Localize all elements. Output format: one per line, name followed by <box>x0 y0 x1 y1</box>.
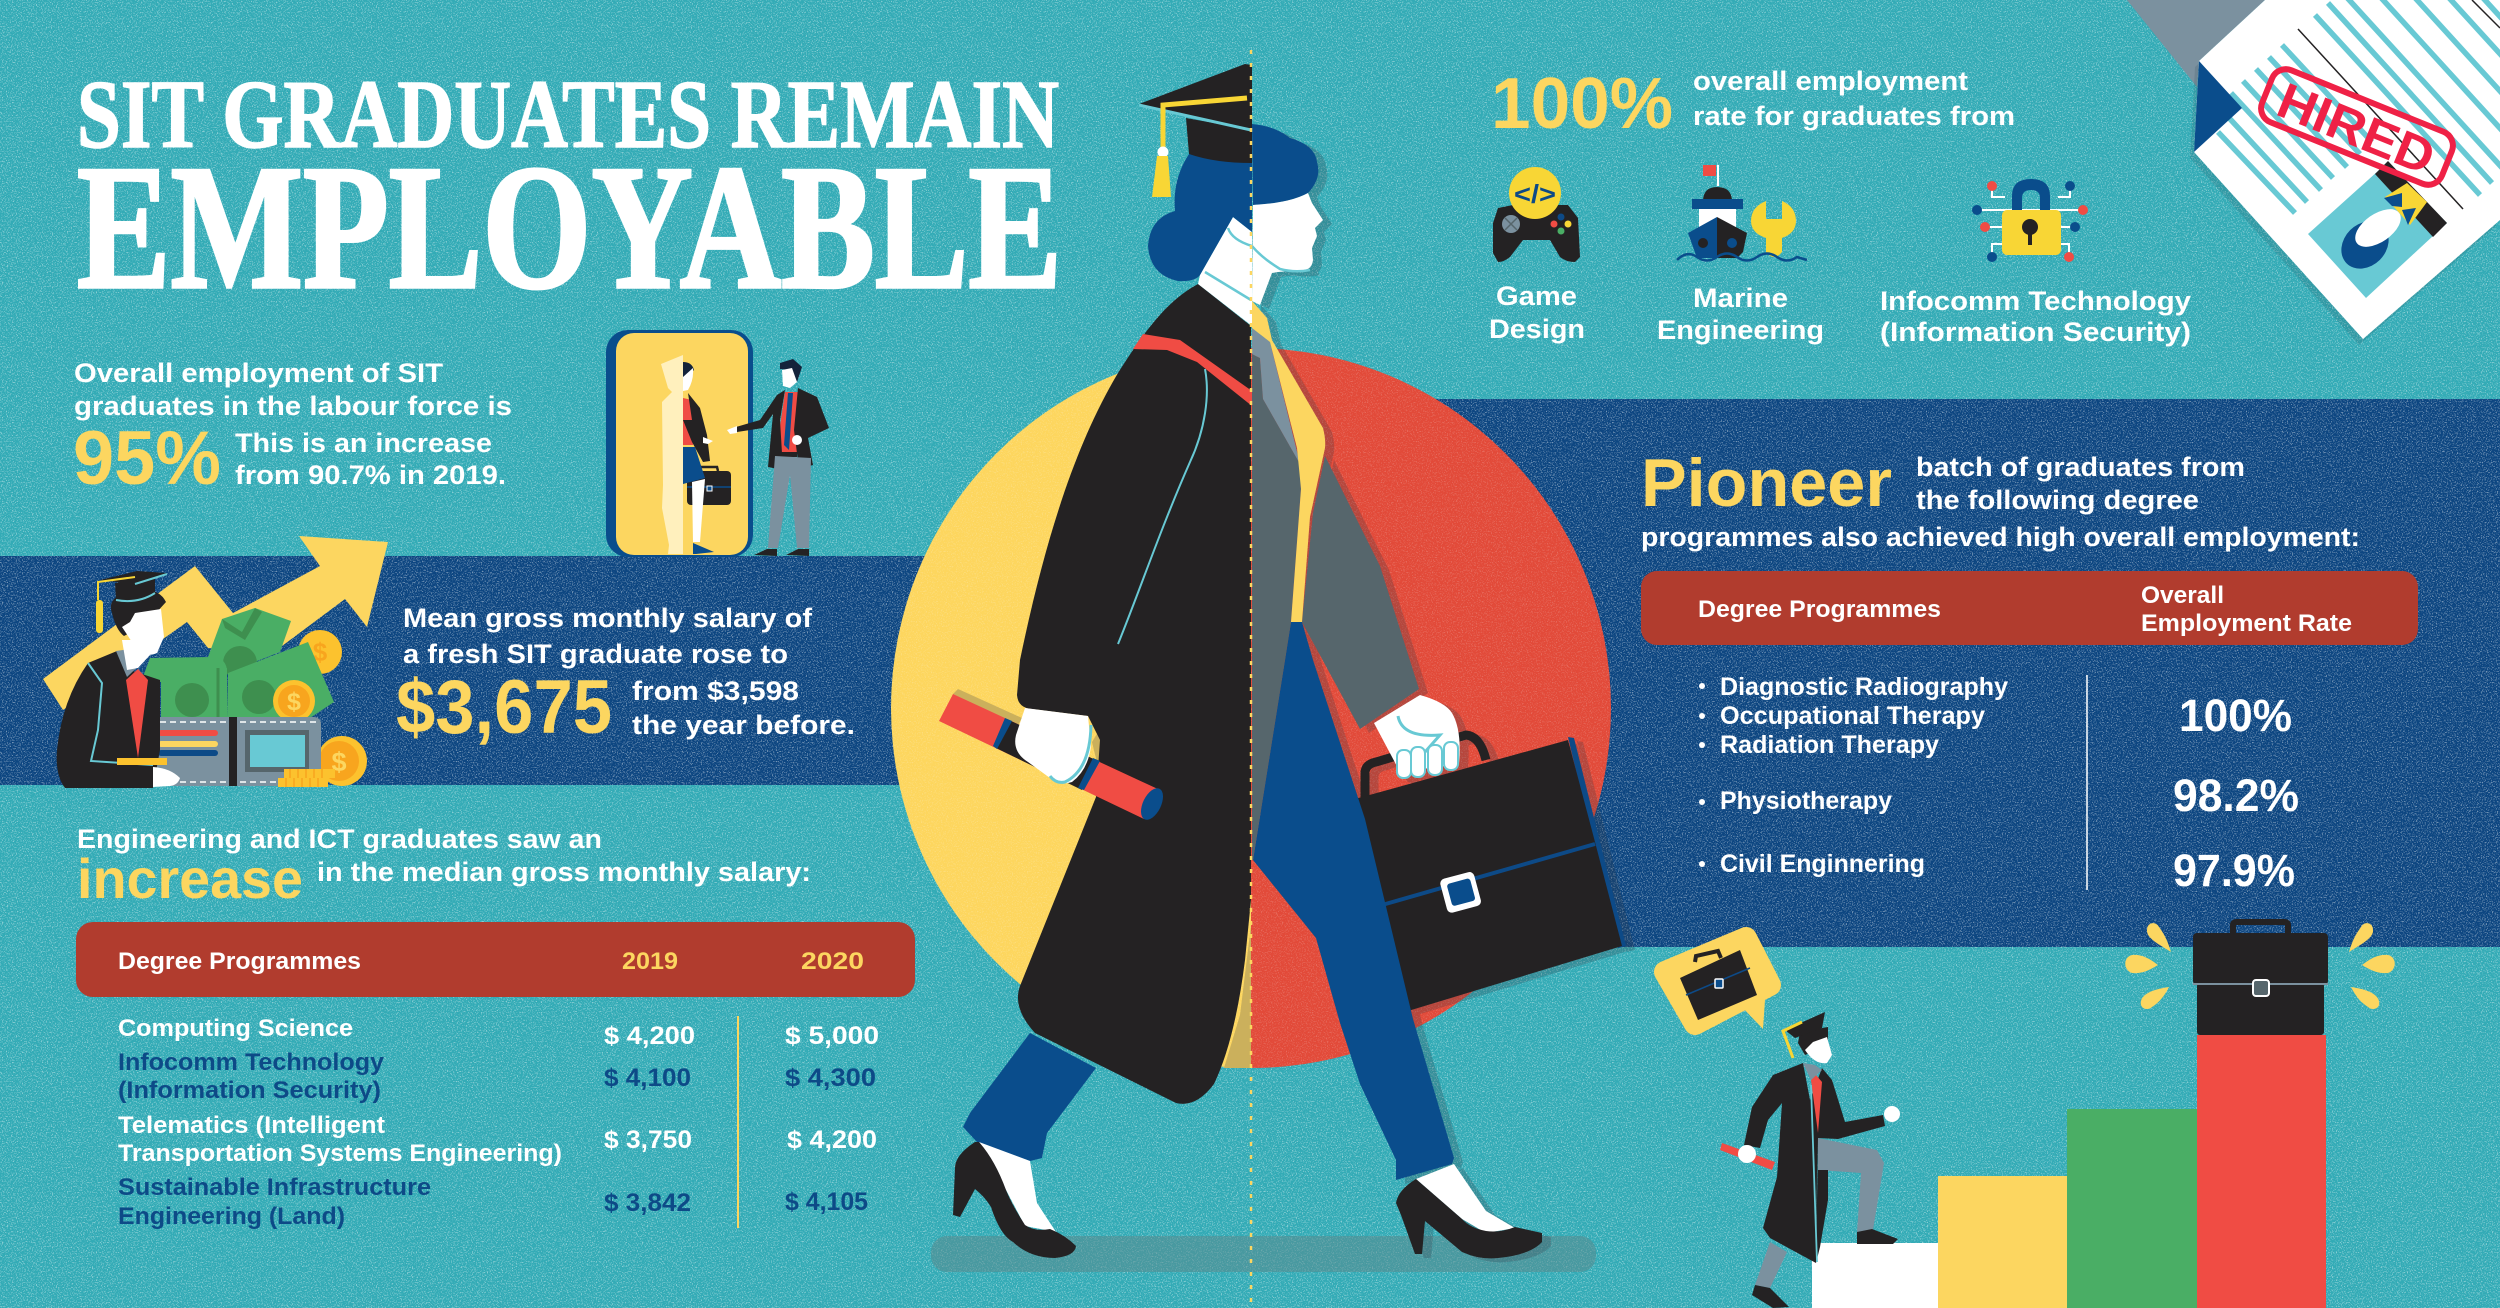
back leg trouser <box>963 1033 1096 1161</box>
back leg <box>1755 1242 1787 1288</box>
row: sustainable infrastructure <box>118 1174 868 1230</box>
text block: engineering and ICT increase <box>77 824 811 910</box>
row: infocomm technology: $ 4,100 <box>604 1064 691 1092</box>
gown <box>1017 284 1251 1104</box>
head and cap <box>1798 1027 1828 1055</box>
jacket sleeve <box>1302 456 1419 729</box>
label: game design: Design <box>1489 314 1585 344</box>
navy band right <box>1400 399 2500 947</box>
employment rates: 100% <box>2179 690 2292 741</box>
title: EMPLOYABLE <box>77 128 1062 326</box>
icon: padlock and circuit <box>1972 179 2088 262</box>
table header <box>76 922 915 997</box>
lower gown shadow <box>1224 925 1251 1068</box>
cash pile <box>141 608 342 722</box>
row: telematics: Transportation Systems Engineering) <box>118 1140 562 1167</box>
table header: Degree Programmes <box>1698 596 1941 623</box>
text block: 100% employment <box>1491 64 2015 144</box>
small graduate climbing <box>1720 1012 1900 1308</box>
text block: pioneer batch: the following degree <box>1916 485 2199 515</box>
programme list: Radiation Therapy <box>1720 731 1939 759</box>
text block: overall employment 95%: This is an increase <box>235 428 492 458</box>
icon: hired resume <box>2127 0 2500 339</box>
programme list: Diagnostic Radiography <box>1720 673 2008 701</box>
speech bubble with briefcase <box>1665 938 1770 1029</box>
programme list: Civil Enginnering <box>1720 850 1925 878</box>
text block: pioneer batch: Pioneer <box>1641 445 1892 521</box>
label: marine engineering: Engineering <box>1657 315 1824 345</box>
jacket inner <box>1252 354 1301 860</box>
programme list: Occupational Therapy <box>1720 702 1985 730</box>
text block: overall employment 95% <box>73 358 512 501</box>
wallet <box>145 717 321 786</box>
text block: engineering and ICT increase: increase <box>77 847 303 910</box>
text block: mean salary: from $3,598 <box>632 676 799 706</box>
main figure: professional half <box>1252 124 1626 1258</box>
front shoe <box>1396 1179 1542 1258</box>
back ankle <box>979 1142 1056 1232</box>
sleeve shadow on circle <box>1092 644 1118 775</box>
red half circle <box>1251 348 1611 1068</box>
main figure: graduate half <box>939 64 1252 1258</box>
employment rates <box>2173 690 2299 896</box>
row: sustainable infrastructure: Sustainable Infrastructure <box>118 1174 431 1201</box>
navy band left <box>0 556 1000 785</box>
hired stamp: HIRED <box>2270 72 2443 186</box>
table header: 2020 <box>801 948 864 975</box>
big coin <box>317 736 367 786</box>
neck <box>1198 217 1252 326</box>
row: telematics: $ 3,750 <box>604 1126 692 1154</box>
text block: pioneer batch <box>1641 445 2360 552</box>
title: SIT GRADUATES REMAIN <box>77 61 1059 168</box>
label: marine engineering <box>1657 283 1824 345</box>
icon: briefcase on top of stairs <box>2193 922 2328 1035</box>
employment rates: 97.9% <box>2173 845 2295 896</box>
right hand <box>1374 695 1460 778</box>
label: infocomm technology: (Information Security) <box>1880 317 2191 347</box>
right hair <box>1252 124 1318 205</box>
row: infocomm technology: (Information Security) <box>118 1077 381 1104</box>
row: sustainable infrastructure: $ 4,105 <box>785 1188 868 1216</box>
front ankle <box>1416 1164 1515 1233</box>
row: computing science: Computing Science <box>118 1015 353 1042</box>
left hand <box>1015 708 1091 783</box>
table: pioneer batch employment <box>1641 571 2418 896</box>
text block: engineering and ICT increase: Engineering and ICT graduates saw an <box>77 824 602 854</box>
employment rates: 98.2% <box>2173 770 2299 821</box>
raised leg <box>1818 1138 1884 1232</box>
row: telematics: $ 4,200 <box>787 1126 877 1154</box>
text block: 100% employment: 100% <box>1491 64 1673 144</box>
gown teal piping <box>1118 369 1207 644</box>
programme list: Physiotherapy <box>1720 787 1892 815</box>
table header: Degree Programmes <box>118 948 361 975</box>
row: telematics <box>118 1112 877 1167</box>
row: telematics: Telematics (Intelligent <box>118 1112 385 1139</box>
row: sustainable infrastructure: $ 3,842 <box>604 1189 691 1217</box>
cash pile: $ <box>313 637 328 667</box>
title <box>77 61 1062 326</box>
row: infocomm technology: Infocomm Technology <box>118 1049 385 1076</box>
text block: 100% employment: overall employment <box>1693 66 1968 96</box>
table header: Overall <box>2141 582 2224 609</box>
back shoe <box>953 1142 1076 1258</box>
programme list <box>1699 673 2008 878</box>
row: computing science <box>118 1015 879 1050</box>
row: infocomm technology <box>118 1049 876 1104</box>
text block: mean salary: $3,675 <box>396 665 612 750</box>
icon: game controller: </> <box>1514 179 1556 209</box>
text block: pioneer batch: batch of graduates from <box>1916 452 2245 482</box>
ground shadow <box>931 1236 1596 1272</box>
text block: pioneer batch: programmes also achieved high overall employment: <box>1641 522 2360 552</box>
label: game design: Game <box>1496 281 1577 311</box>
coin stacks <box>278 769 335 787</box>
scroll <box>939 689 1168 823</box>
hood strap <box>1133 334 1252 406</box>
table header: 2019 <box>622 948 678 975</box>
text block: mean salary <box>396 603 855 750</box>
stairs chart <box>1812 1035 2326 1308</box>
businessman <box>780 359 802 382</box>
icon: yellow sparks <box>2125 923 2395 1009</box>
text block: overall employment 95%: graduates in the labour force is <box>74 391 512 421</box>
cash pile: $ <box>287 688 301 716</box>
text block: overall employment 95%: 95% <box>73 416 221 501</box>
table header <box>1641 571 2418 645</box>
rising arrow <box>43 536 388 710</box>
yellow half circle <box>891 348 1251 1068</box>
label: infocomm technology <box>1880 286 2191 347</box>
gown <box>1744 1063 1885 1263</box>
table: median salary <box>76 922 915 1230</box>
scroll <box>1720 1143 1775 1170</box>
resume photo <box>2308 161 2447 298</box>
row: sustainable infrastructure: Engineering (Land) <box>118 1203 345 1230</box>
circle speckle <box>880 340 1620 1080</box>
graduate with hand on wallet <box>57 571 180 788</box>
icon: ship and wrench <box>1677 165 1807 260</box>
face <box>1252 193 1323 305</box>
hair and bun <box>1148 154 1252 281</box>
tassel <box>1163 98 1247 150</box>
text block: mean salary: Mean gross monthly salary of <box>403 603 813 633</box>
mortarboard <box>1139 64 1252 131</box>
centre dashed fold line <box>1250 50 1252 1308</box>
text block: overall employment 95%: Overall employment of SIT <box>74 358 444 388</box>
woman silhouette half <box>661 355 683 554</box>
icon: rising arrow, graduate, cash and wallet <box>43 536 388 788</box>
briefcase <box>1355 735 1626 1011</box>
icon: game controller <box>1493 167 1580 262</box>
text block: overall employment 95%: from 90.7% in 2019. <box>235 460 506 490</box>
icon: phone with handshake <box>606 330 829 557</box>
front leg trouser <box>1253 622 1454 1180</box>
table header: Employment Rate <box>2141 610 2352 637</box>
label: game design <box>1489 281 1585 344</box>
label: infocomm technology: Infocomm Technology <box>1880 286 2191 316</box>
yellow shirt <box>1252 301 1325 622</box>
collar <box>1252 328 1300 464</box>
row: computing science: $ 5,000 <box>785 1022 879 1050</box>
text block: mean salary: a fresh SIT graduate rose to <box>403 639 788 669</box>
label: marine engineering: Marine <box>1693 283 1788 313</box>
row: computing science: $ 4,200 <box>604 1022 695 1050</box>
text block: 100% employment: rate for graduates from <box>1693 101 2015 131</box>
row: infocomm technology: $ 4,300 <box>785 1064 876 1092</box>
text block: engineering and ICT increase: in the median gross monthly salary: <box>317 857 811 887</box>
big coin: $ <box>331 747 347 777</box>
text block: mean salary: the year before. <box>632 710 855 740</box>
